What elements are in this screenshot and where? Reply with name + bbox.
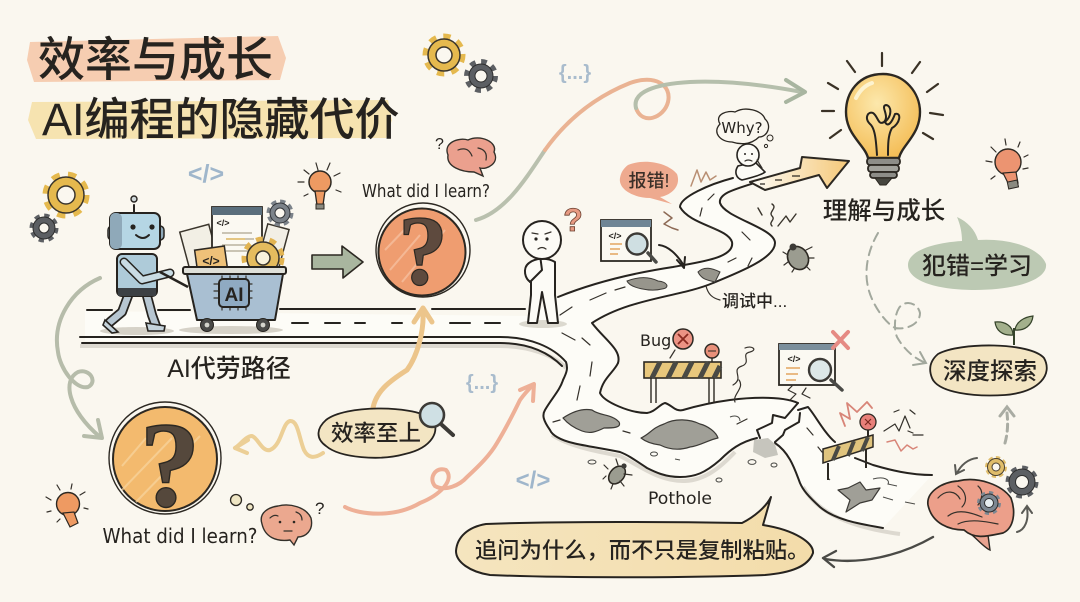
brain top: ? [435,136,444,153]
robot legs [110,296,156,326]
label: AI path: AI代劳路径 [167,355,291,383]
question circle: yellow: ? [140,398,200,533]
code window with magnifier: </> [608,231,622,241]
curved arrow to understanding [476,80,805,220]
road dashes [553,194,822,452]
barrier board [644,362,721,378]
upper road left edge [558,178,733,297]
cart shadow [179,326,283,334]
road: AI path [80,172,932,534]
red squiggles [840,402,923,451]
brain [928,480,1014,536]
AI chip: AI [224,285,244,306]
question circle: orange [376,195,470,306]
robot body [117,254,157,296]
gears top centre [426,37,495,90]
head [523,221,561,259]
barrier posts [651,378,714,403]
callout: ask why: 追问为什么，而不只是复制粘贴。 [475,538,809,563]
code window in cart [180,224,220,275]
arrow: left gray loop [57,278,102,438]
arrow: dashed gray up to exploration [1000,407,1014,443]
code braces top: {...} [559,62,591,84]
pill: deep exploration: 深度探索 [943,358,1037,384]
code card: </> [202,254,220,268]
arrow: efficiency wavy to yellow question [235,421,323,457]
icon: beetle lower [603,459,632,489]
label: understanding and growth: 理解与成长 [823,197,945,225]
small gold gear [987,458,1005,476]
icon: beetle upper [783,243,814,273]
code braces lower: {...} [466,372,498,394]
title line 2: AI编程的隐藏代价 [42,94,400,145]
question circle: orange: ? [398,195,448,306]
thinking person [519,202,583,328]
gold gear in cart [245,240,281,276]
title line 1: 效率与成长 [38,33,273,86]
lower road inner edge [600,363,798,413]
barrier board [823,435,873,463]
speech bubble: error [620,162,678,204]
cart wheels [200,318,214,332]
dark gear [1008,468,1036,496]
icon: magnifier [420,403,453,435]
upper road right edge [592,178,775,363]
arrow: dashed gray to deep exploration [866,233,926,365]
pill: mistakes are learning [908,217,1046,290]
hand to chin [530,255,542,282]
road top edge left [87,309,525,310]
Bug text: Bug [640,331,671,350]
title highlight: line 2 [28,100,392,139]
road crack [757,403,800,442]
stop sign [860,414,876,430]
arrow: brain to callout [823,537,933,567]
debris [588,416,915,504]
stop sign [705,344,719,358]
arrow: window to pothole [659,245,685,268]
arrow: efficiency to orange question [373,308,432,408]
pill: efficiency first: 效率至上 [331,421,421,446]
speech bubble: error: 报错! [628,171,670,191]
icon: sprout [995,316,1033,345]
arrow: road end to understanding [750,157,849,190]
squiggle spring [733,347,754,402]
thought cloud: why: Why? [721,119,763,137]
label: what did I learn bottom: What did I learn? [102,524,258,548]
brain bottom left [261,499,324,545]
label: pothole: Pothole [648,489,712,508]
brain stem [972,535,990,550]
road shadow [80,346,900,534]
arrow: cart to question [312,246,363,278]
barrier lower [823,414,876,480]
label: what did I learn top: What did I learn? [362,182,490,202]
robot [100,196,188,335]
code window with magnifier [601,220,656,262]
icon: small bulb bottom left [46,484,88,527]
crack patch [753,438,778,458]
red x badge [673,329,693,349]
question circle: yellow [109,398,221,533]
label: debugging: 调试中... [722,292,787,311]
gear in brain [979,493,999,513]
robot antenna [133,205,135,214]
question mark: ? [563,202,583,238]
puddles upper road [627,268,720,290]
error squiggles [664,170,796,230]
robot arm [124,262,170,280]
code tag lower: </> [516,467,550,494]
road surface [85,172,932,528]
arrow: bottom orange loop [345,384,534,514]
pill: efficiency first [318,408,435,458]
cart [179,207,289,334]
title highlight: line 1 [27,36,286,82]
road centre dashes [292,322,500,324]
potholes lower road [563,409,880,512]
small thinking person [736,144,765,180]
robot head [108,226,116,240]
cart: </> [216,218,230,228]
gears left [32,175,86,240]
callout: ask why [456,497,813,577]
pill: mistakes are learning: 犯错=学习 [922,253,1032,280]
body [525,259,558,323]
icon: small bulb near cart [298,163,341,209]
thought cloud: why [717,109,773,148]
icon: small bulb top right [986,139,1028,189]
icon: big light bulb [822,53,943,185]
cart basket [187,274,283,320]
robot shadow [100,327,174,335]
brain top [435,136,496,176]
title [27,33,400,145]
circular arrows [955,458,1032,532]
road bottom edge [80,337,757,477]
brain with gears [928,458,1036,550]
gray gear near cart [269,202,291,224]
code tag above cart: </> [188,160,224,188]
barrier with bug label [640,329,721,403]
code window with red x: </> [787,354,801,364]
shadow [519,320,567,328]
brain bottom left: ? [315,499,324,518]
code window with red x [779,332,848,400]
lower road right edge [775,443,883,528]
pill: deep exploration [930,345,1047,395]
bulb rays [822,53,943,139]
thought bubbles [230,494,253,510]
